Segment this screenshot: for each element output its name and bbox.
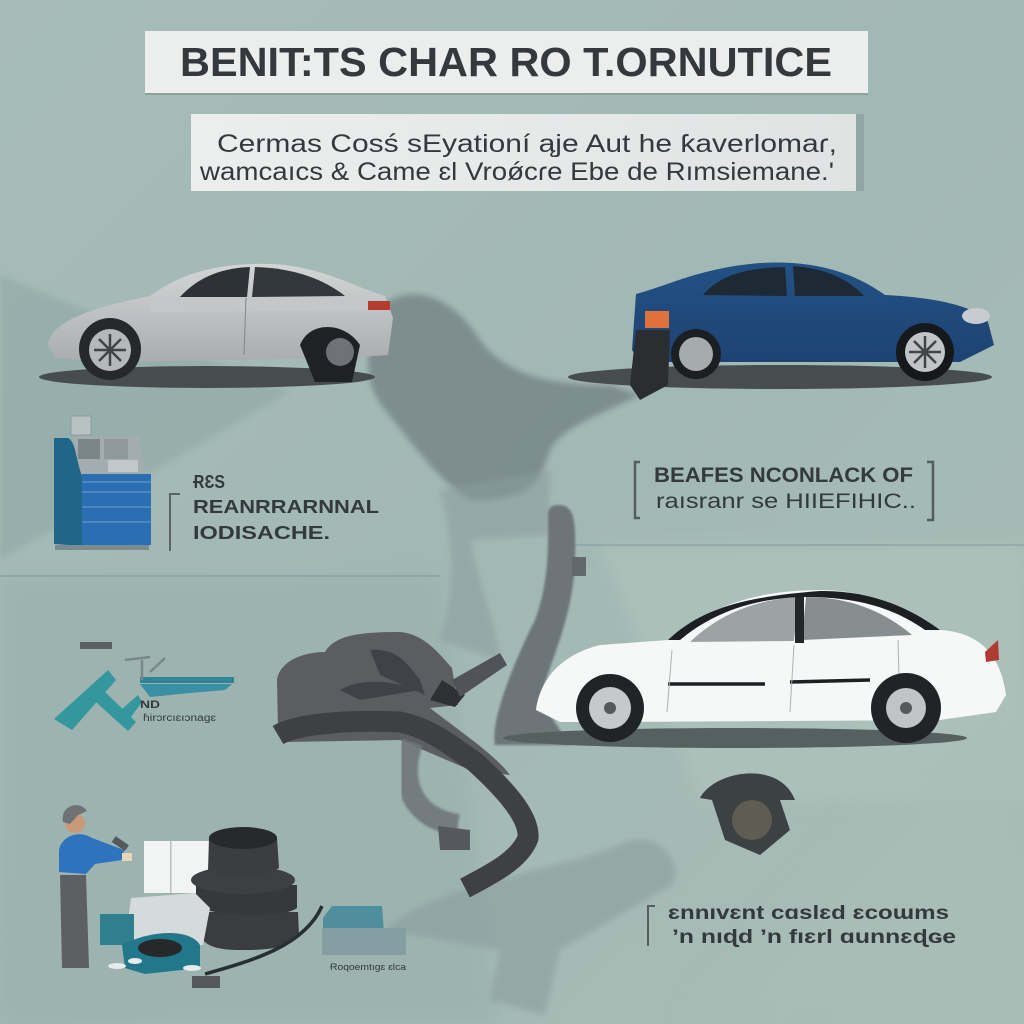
icon: teal lift equipment xyxy=(54,642,234,731)
silver car (damaged wheel) xyxy=(39,264,393,388)
mechanic with tires xyxy=(59,805,322,988)
text block: bottom right: ɛnnıvɛnt cɑslɛd ɛcoɯms xyxy=(668,903,949,924)
text block: left xyxy=(170,472,379,551)
icon: teal lift equipment: ND xyxy=(140,699,160,711)
icon: teal box with caption: Ɍoqoemtıgɛ ɛlca xyxy=(330,962,406,972)
subtitle panel: wamcaıcs & Came ɛl Vroǿcɾe Ebe de Rımsiemane.' xyxy=(199,158,834,186)
blue car (damaged wheel) xyxy=(568,262,994,400)
text block: right: BEAFES NCONLACK OF xyxy=(654,464,913,487)
text block: left: ɌƐS xyxy=(193,472,225,492)
text block: left: REANRRARNNAL xyxy=(193,497,379,517)
icon: teal box with caption xyxy=(322,906,406,972)
title banner: BENIT:TS CHAR RO T.ORNUTICE xyxy=(180,39,832,85)
title banner xyxy=(145,31,868,95)
white car xyxy=(503,590,1006,748)
text block: bottom right xyxy=(648,903,956,948)
text block: right: raısranr se HIIEFIHIC.. xyxy=(656,490,916,513)
subtitle panel: Cermas Cosś sEyationí ąje Aut he ƙaverlomaɾ, xyxy=(217,130,837,158)
tall hose and engine part xyxy=(277,505,586,888)
text block: bottom right: ʼn nıɖd ʼn fıɛrl ɑunnɛɖɢe xyxy=(672,927,956,948)
icon: blue tool cabinet xyxy=(54,416,151,550)
text block: left: IODISACHE. xyxy=(193,523,330,543)
central shadow figure xyxy=(368,294,675,1015)
text block: right xyxy=(635,462,933,520)
subtitle panel xyxy=(191,114,864,191)
icon: brake assembly xyxy=(700,773,795,855)
icon: teal lift equipment: ɦirɔrcıɛıɔnagɛ xyxy=(143,713,216,724)
